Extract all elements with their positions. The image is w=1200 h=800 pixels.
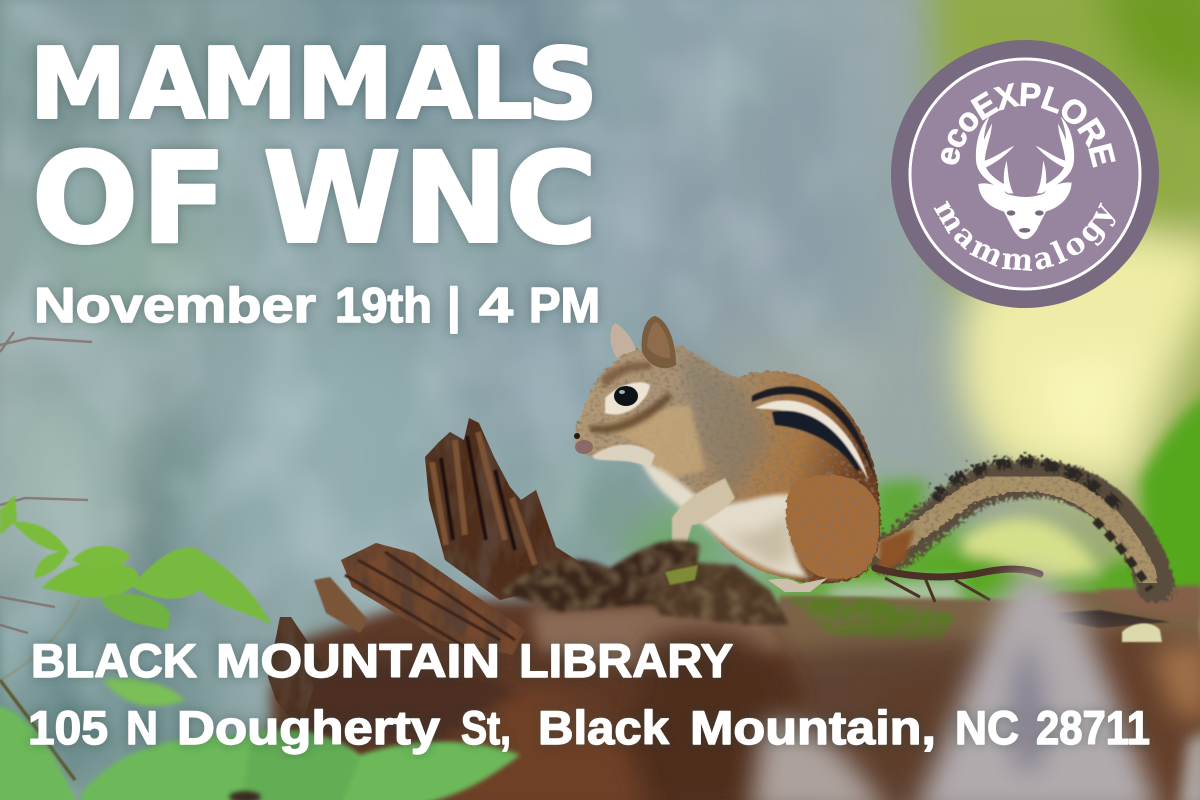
venue address: N <box>126 701 158 754</box>
badge text: ecoEXPLORE: ecoEXPLORE <box>941 82 1116 168</box>
venue address: Dougherty <box>177 701 440 754</box>
venue address: Black <box>538 701 670 754</box>
venue name: MOUNTAIN <box>216 634 500 687</box>
chipmunk body <box>574 345 880 584</box>
stump small pieces <box>314 577 368 633</box>
venue name: LIBRARY <box>519 634 733 687</box>
venue address: NC <box>955 701 1019 754</box>
soft foreground leaves <box>0 678 520 800</box>
grey blurred log, lower centre <box>750 720 890 800</box>
dark gap between leaves <box>229 791 261 800</box>
green leaves lower-left <box>0 332 520 800</box>
venue address <box>28 701 1150 754</box>
chipmunk muzzle white <box>592 445 655 468</box>
title <box>30 28 598 272</box>
badge: ecoEXPLORE mammalogy <box>891 40 1159 308</box>
stump slab <box>341 543 525 655</box>
chipmunk grey shoulder <box>680 350 770 500</box>
stump upper snag <box>425 418 600 600</box>
upper leaf spray <box>0 495 272 630</box>
stump lower mound <box>230 590 815 800</box>
chipmunk tail <box>878 458 1152 590</box>
date and time: | <box>447 279 461 333</box>
stump cones <box>500 540 700 612</box>
venue address: St, <box>461 701 511 754</box>
foreground: forest floor <box>740 585 1200 800</box>
icon: deer head with antlers <box>976 117 1074 239</box>
chipmunk back stripes <box>752 386 876 480</box>
chipmunk belly shading <box>720 510 790 565</box>
chipmunk foot <box>768 578 828 592</box>
chipmunk eye <box>614 386 638 406</box>
chipmunk near ear <box>642 316 676 368</box>
badge text: mammalogy: mammalogy <box>934 200 1116 271</box>
chipmunk belly <box>640 460 808 577</box>
venue address: 105 <box>28 701 108 754</box>
venue address: 28711 <box>1036 701 1150 754</box>
date and time <box>34 279 600 333</box>
chipmunk front arm <box>672 478 735 545</box>
grey blurred log <box>915 571 1160 800</box>
chipmunk cheek <box>600 405 705 480</box>
date and time: PM <box>529 279 600 333</box>
date and time: 19th <box>335 279 432 333</box>
date and time: 4 <box>479 279 513 333</box>
date and time: November <box>34 279 316 333</box>
chipmunk haunch <box>786 475 879 579</box>
venue address: Mountain, <box>690 701 936 754</box>
chipmunk <box>574 316 880 592</box>
venue name: BLACK <box>31 634 197 687</box>
chipmunk far ear <box>610 323 636 358</box>
chipmunk eye stripe <box>605 382 650 415</box>
chipmunk twig <box>875 568 1040 602</box>
tree stump <box>230 418 815 800</box>
title: OF WNC <box>32 126 597 272</box>
chipmunk nose <box>575 440 593 454</box>
title: MAMMALS <box>30 28 598 140</box>
venue name <box>31 634 733 687</box>
